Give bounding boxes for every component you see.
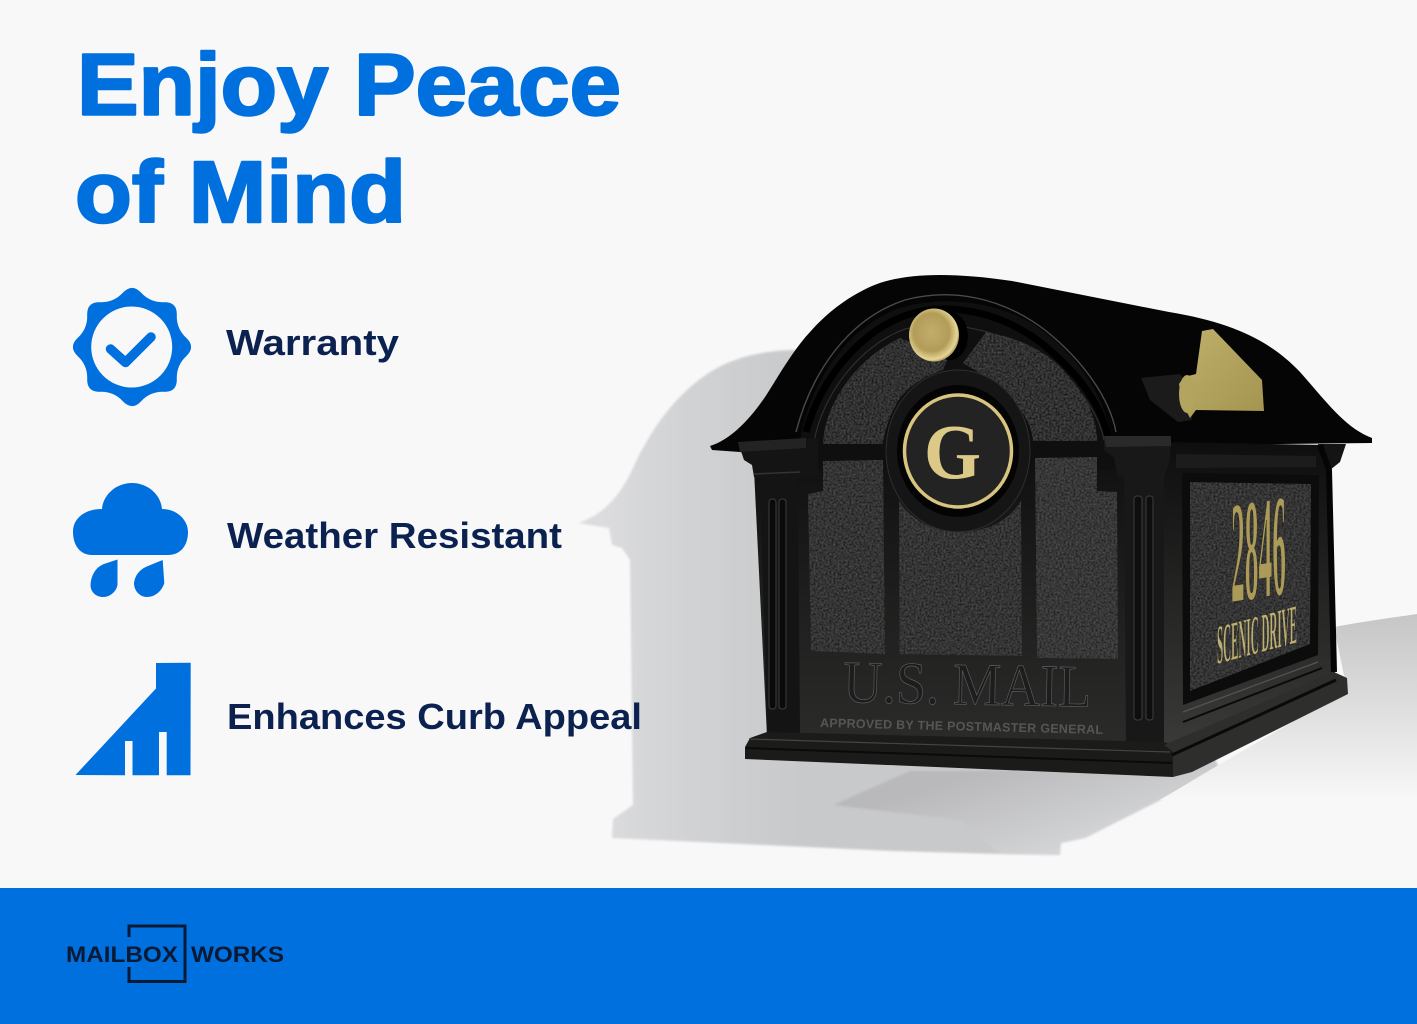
brass knob	[909, 308, 968, 362]
flag bracket	[1141, 374, 1192, 422]
arched front fascia	[800, 301, 1118, 470]
title	[75, 36, 621, 241]
label: enhances curb appeal: Enhances Curb Appeal	[227, 696, 642, 737]
title: of Mind	[75, 144, 406, 241]
icon: house with bars	[76, 663, 191, 775]
ground shadow right of mailbox	[1160, 614, 1417, 800]
embossed caption: APPROVED BY THE POSTMASTER GENERAL	[820, 716, 1104, 737]
mailbox side body	[1160, 442, 1335, 748]
label: weather resistant: Weather Resistant	[227, 515, 562, 556]
mailbox front body	[754, 470, 1164, 745]
icon: warranty badge	[73, 288, 191, 406]
label: warranty: Warranty	[226, 322, 399, 363]
footer band	[0, 888, 1417, 1024]
arch highlights	[796, 295, 1116, 442]
mailbox side panel	[1176, 445, 1334, 722]
eave bracket	[1318, 444, 1346, 470]
mailbox illustration	[710, 275, 1372, 777]
left pilaster	[738, 438, 818, 736]
medallion	[886, 370, 1030, 532]
arch panel right	[963, 332, 1097, 441]
lower panel right	[1035, 457, 1118, 659]
mailbox roof	[710, 275, 1372, 470]
logo: mailbox works: WORKS	[191, 942, 284, 967]
embossed lettering U.S. MAIL: U.S. MAIL	[843, 649, 1092, 720]
lower panel left	[808, 460, 885, 654]
lower panel centre	[899, 501, 1022, 656]
brass flag	[1179, 329, 1264, 418]
logo: mailbox works	[66, 926, 284, 982]
medallion letter: G	[924, 408, 981, 495]
icon: rain cloud	[73, 483, 188, 597]
right pilaster	[1104, 436, 1171, 745]
title: Enjoy Peace	[77, 36, 621, 134]
mailbox base	[745, 672, 1348, 777]
arch panel left	[823, 338, 948, 444]
wall shadow of mailbox	[578, 350, 1220, 855]
logo: mailbox works: MAILBOX	[66, 942, 178, 967]
